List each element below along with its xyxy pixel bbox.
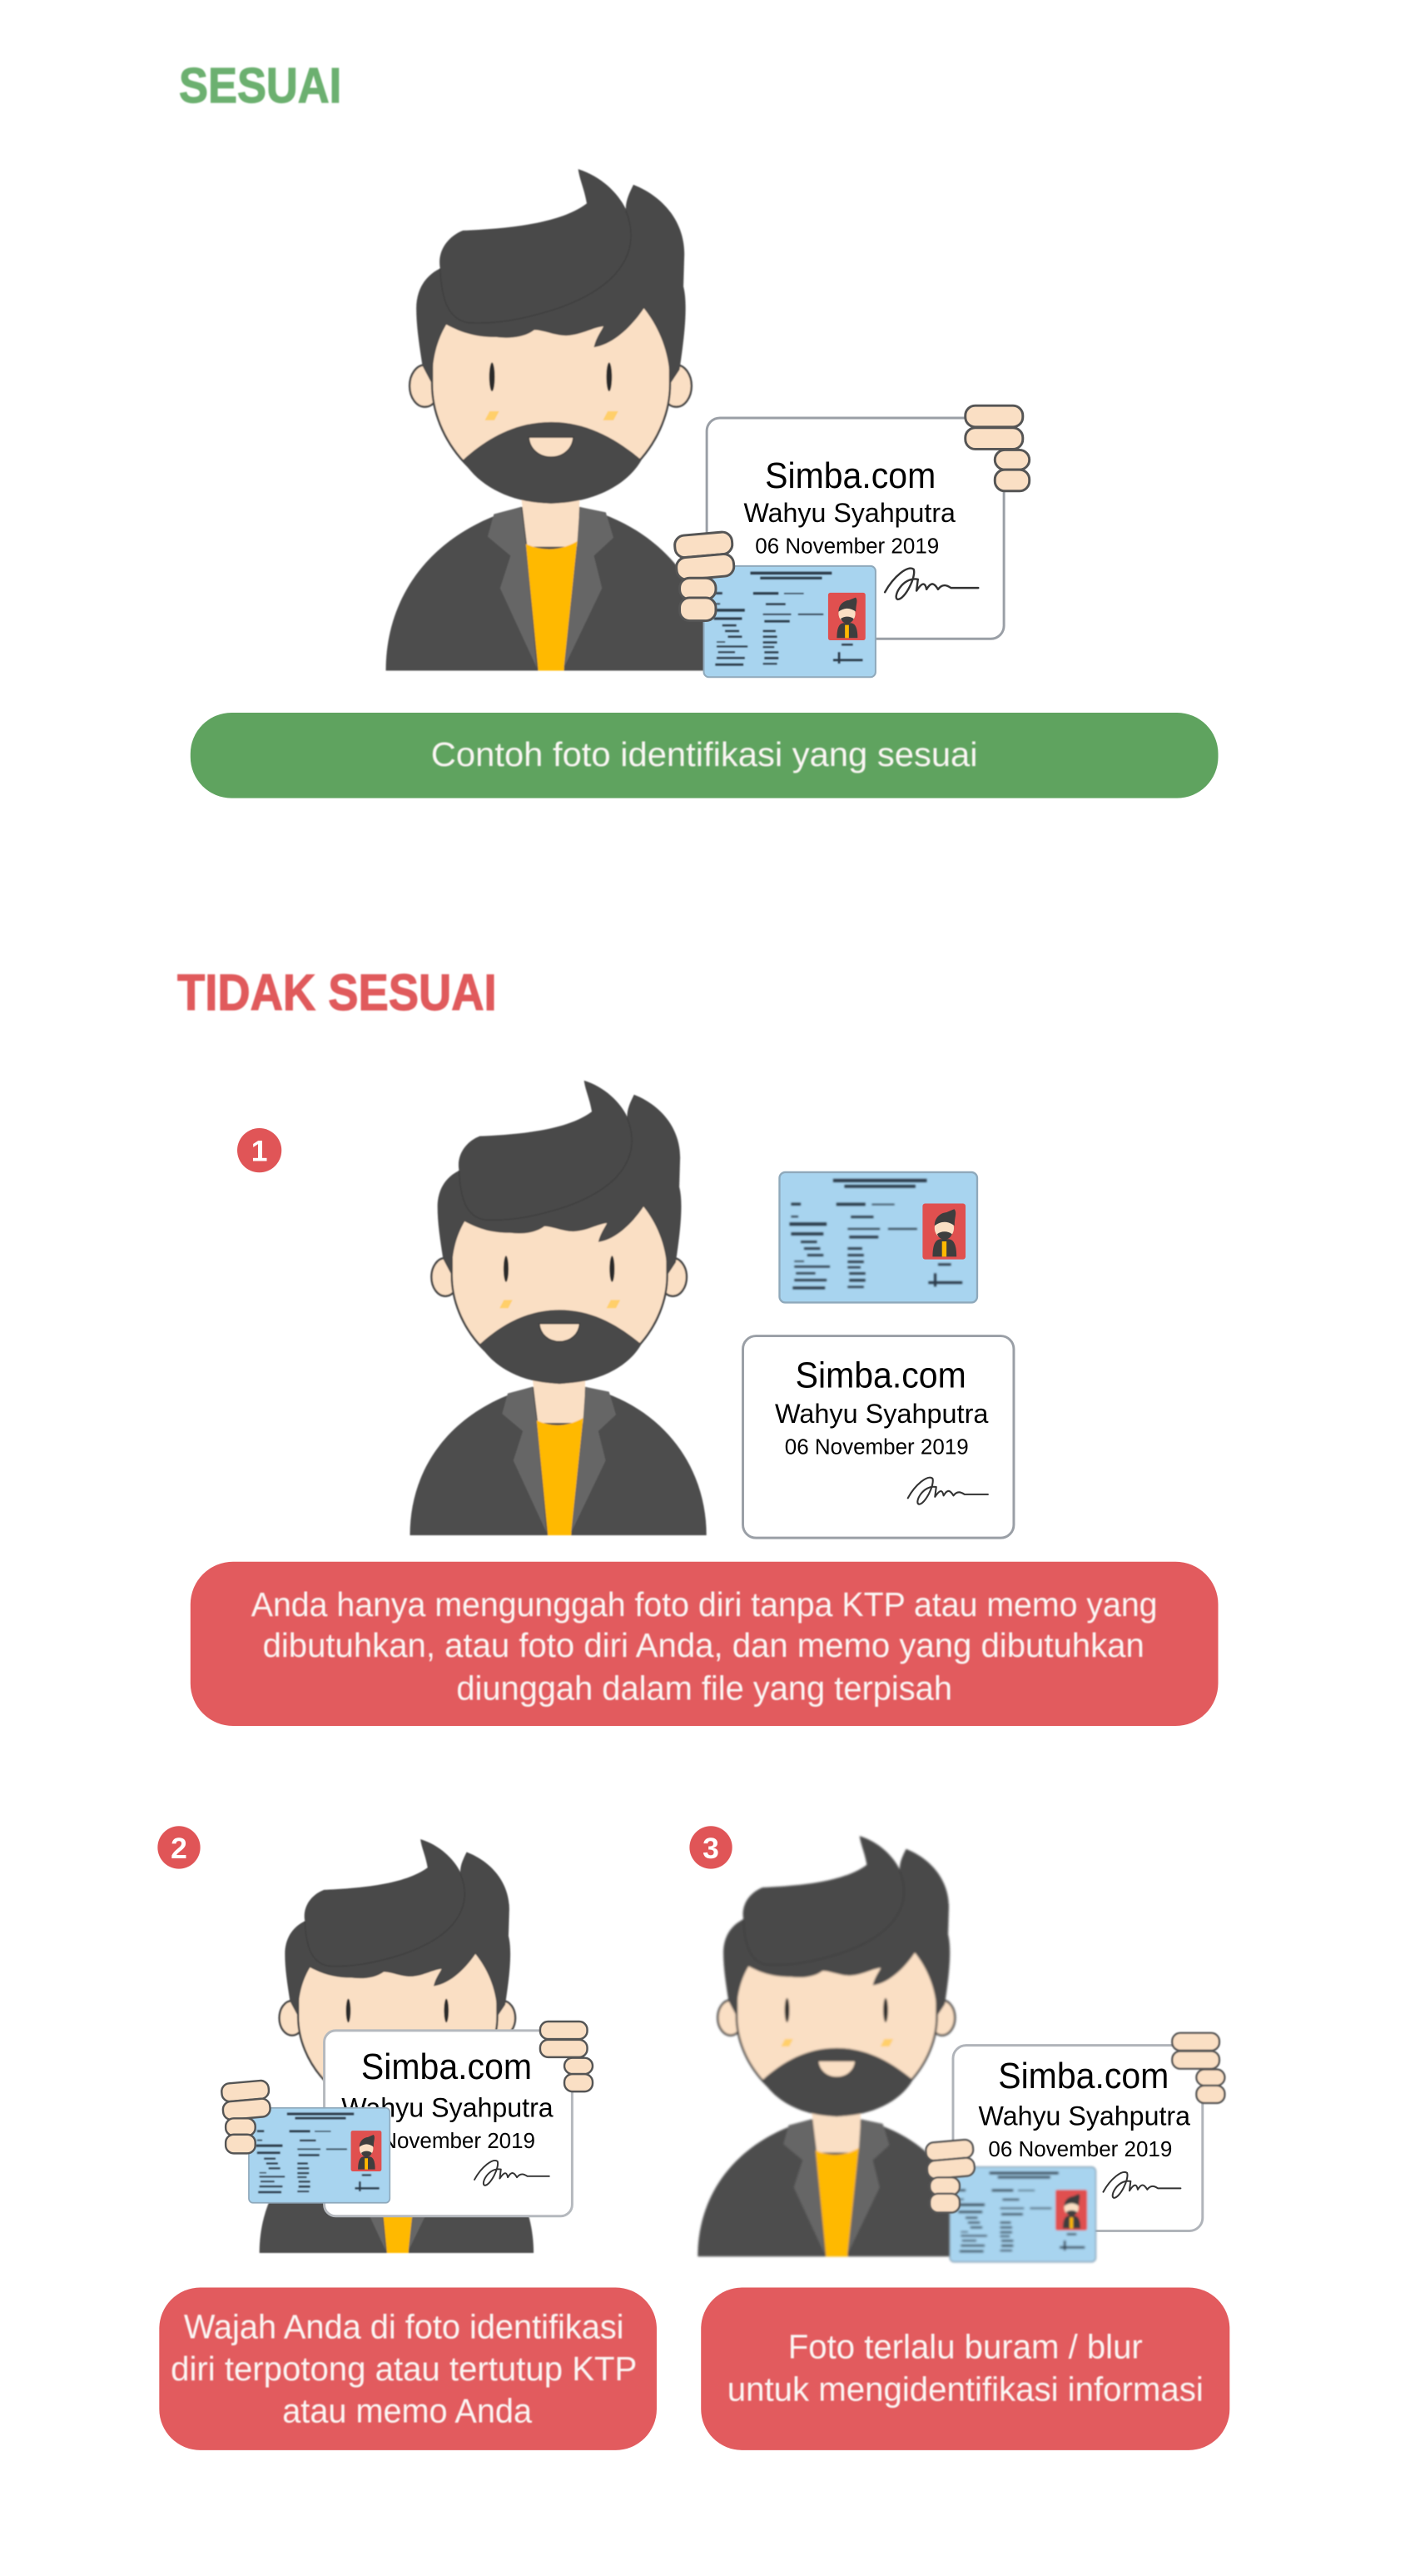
memo card: 06 November 2019: [755, 535, 939, 559]
memo card: Wahyu Syahputra: [743, 498, 956, 528]
caption pill red 3: untuk mengidentifikasi informasi: [727, 2370, 1204, 2409]
heading: SESUAI: SESUAI: [179, 57, 341, 113]
hand left: [674, 531, 735, 621]
caption pill red 2: [159, 2288, 657, 2450]
panel: example 2 illustration: [221, 1839, 593, 2253]
memo card separate: 06 November 2019: [785, 1436, 969, 1460]
badge 2: [157, 1826, 201, 1869]
memo card: Simba.com: [765, 456, 936, 496]
caption pill red 3: Foto terlalu buram / blur: [788, 2327, 1143, 2365]
memo card: [707, 418, 1004, 639]
KTP card separate: [779, 1172, 977, 1302]
panel: example 1 illustration: [410, 1081, 1014, 1538]
memo card: Simba.com: [998, 2056, 1169, 2096]
caption pill red 2: atau memo Anda: [282, 2391, 533, 2429]
KTP card: [704, 566, 876, 677]
caption pill red 2: Wajah Anda di foto identifikasi: [184, 2308, 624, 2346]
memo card covering face: Simba.com: [361, 2047, 532, 2087]
page content: [157, 57, 1229, 2450]
badge 2: 2: [171, 1832, 187, 1865]
heading: TIDAK SESUAI: TIDAK SESUAI: [177, 964, 497, 1021]
hand left: [926, 2139, 976, 2212]
badge 1: 1: [251, 1134, 268, 1167]
caption pill red 2: diri terpotong atau tertutup KTP: [171, 2350, 637, 2388]
memo card separate: Wahyu Syahputra: [775, 1399, 989, 1429]
caption pill red 1: diunggah dalam file yang terpisah: [456, 1668, 952, 1707]
caption pill red 3: [701, 2288, 1229, 2450]
memo card separate: [743, 1336, 1014, 1538]
memo card covering face: [325, 2031, 572, 2216]
hand right: [966, 405, 1030, 491]
caption pill green: Contoh foto identifikasi yang sesuai: [431, 735, 978, 773]
memo card separate: Simba.com: [796, 1356, 966, 1396]
panel: contoh sesuai illustration: [386, 169, 1030, 677]
memo card covering face: Wahyu Syahputra: [341, 2092, 554, 2122]
caption pill green: [191, 713, 1219, 798]
hand right: [540, 2022, 593, 2091]
hand left: [221, 2080, 271, 2153]
memo card: Wahyu Syahputra: [979, 2101, 1191, 2131]
hand right: [1172, 2033, 1224, 2103]
caption pill red 1: dibutuhkan, atau foto diri Anda, dan memo yang dibutuhkan: [263, 1626, 1144, 1664]
badge 1: [237, 1128, 281, 1172]
man: [260, 1839, 534, 2253]
caption pill red 1: [191, 1562, 1219, 1726]
badge 3: [689, 1826, 732, 1869]
KTP card: [950, 2167, 1095, 2262]
caption pill red 1: Anda hanya mengunggah foto diri tanpa KTP atau memo yang: [251, 1585, 1158, 1624]
KTP card: [249, 2108, 390, 2203]
panel: example 3 illustration, blurred: [698, 1836, 1224, 2262]
memo card: [953, 2046, 1203, 2231]
man: [698, 1836, 973, 2256]
badge 3: 3: [703, 1832, 719, 1865]
man: [410, 1081, 707, 1535]
memo card covering face: 06 November 2019: [351, 2130, 535, 2153]
memo card: 06 November 2019: [988, 2138, 1172, 2161]
man holding ID and memo: [386, 169, 713, 670]
